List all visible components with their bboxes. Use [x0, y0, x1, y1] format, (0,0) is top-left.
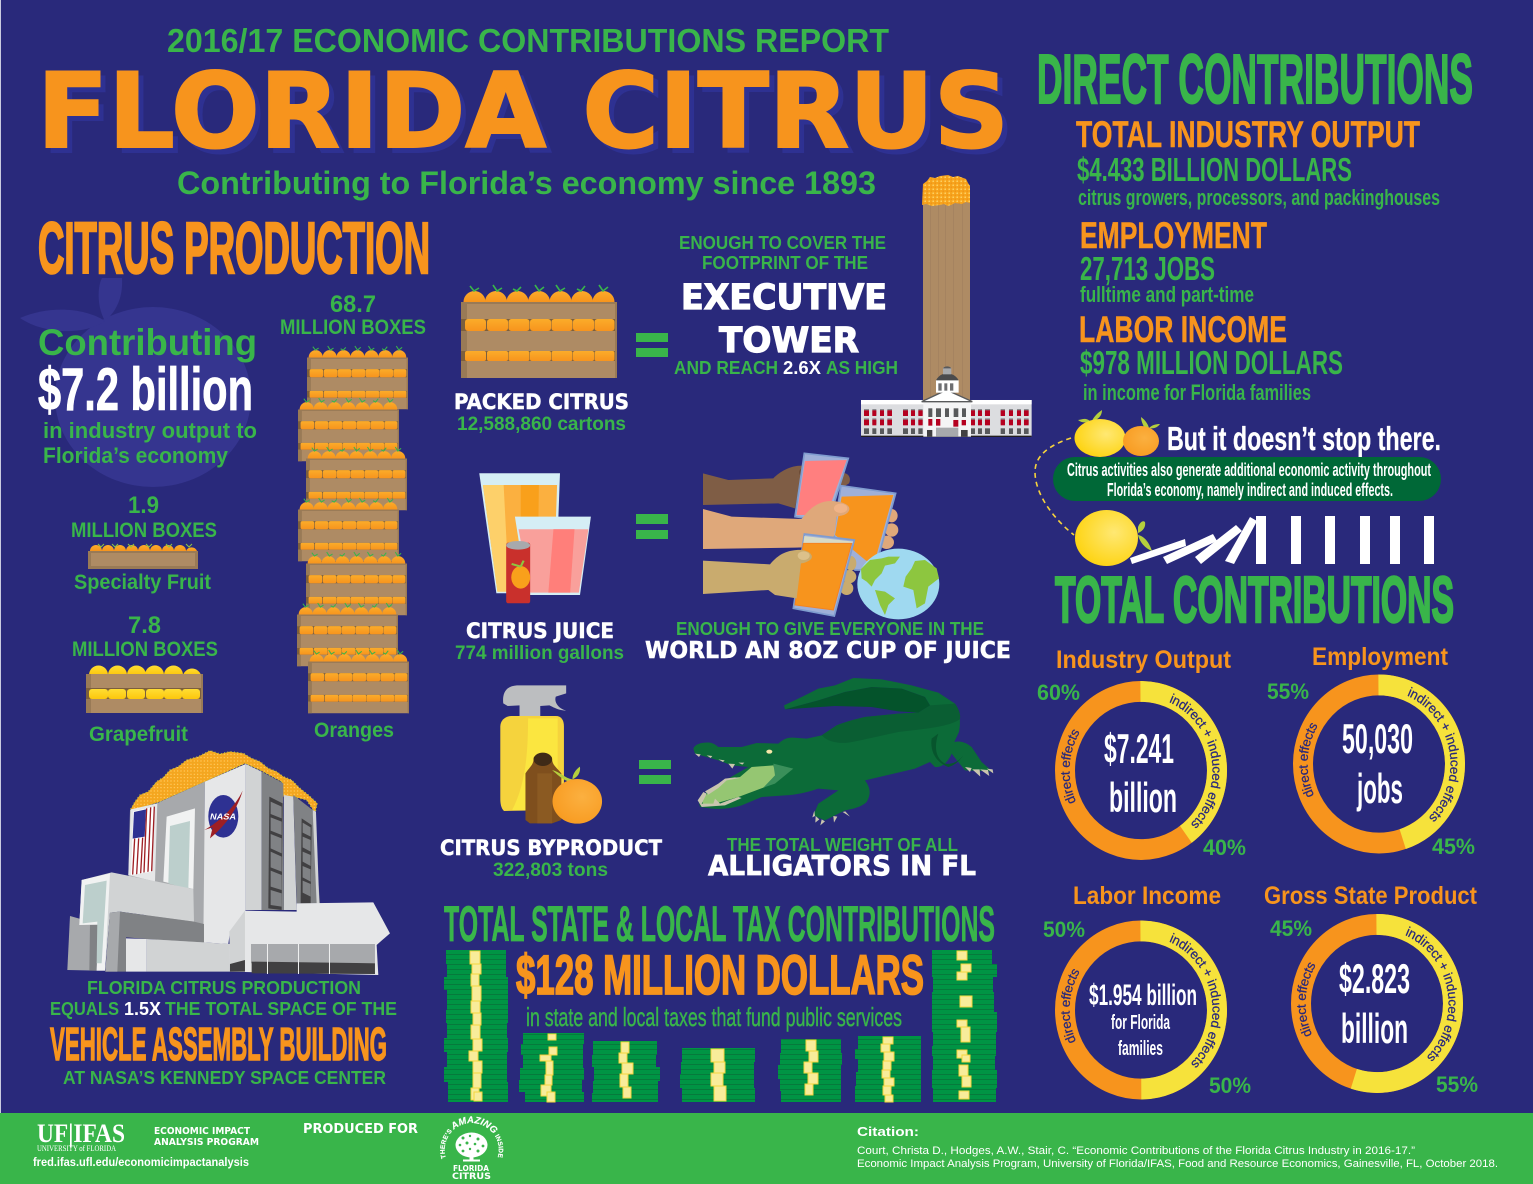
alligator comparison text	[708, 835, 976, 882]
building comparison text	[50, 978, 397, 1088]
chart: labor income donut: 50%	[1043, 917, 1085, 942]
chart: employment donut: 50,030	[1342, 715, 1413, 762]
chart: labor income donut: 50%	[1209, 1073, 1251, 1098]
panel: citrus byproduct comparison	[440, 678, 993, 882]
callout: contributing $7.2 billion: Contributing	[38, 322, 257, 363]
callout: contributing $7.2 billion: $7.2 billion	[38, 356, 253, 423]
executive tower text: ENOUGH TO COVER THE	[679, 233, 886, 253]
alligator comparison text: ALLIGATORS IN FL	[708, 849, 976, 882]
tax amount: $128 MILLION DOLLARS	[516, 943, 924, 1006]
juice label	[455, 619, 624, 664]
chart: employment donut: direct effects	[1299, 723, 1318, 797]
chart: gross state product donut: Gross State Product	[1264, 882, 1478, 910]
header block	[37, 22, 1014, 201]
icon: alligator	[693, 678, 993, 825]
chart: industry output donut: billion	[1109, 774, 1177, 821]
icon: tower of crates and capitol	[861, 175, 1032, 437]
logo: Florida Citrus: THERE’S AMAZING INSIDE	[440, 1116, 504, 1160]
panel: direct contributions	[1037, 40, 1473, 405]
grapefruit: 7.8	[128, 612, 161, 639]
oranges: 68.7	[330, 291, 376, 318]
icon: right tall money stack	[932, 950, 997, 1102]
callout pill	[1053, 457, 1441, 501]
icon: NASA vehicle assembly building topped with citrus: NASA	[210, 811, 236, 821]
callout: contributing $7.2 billion	[38, 322, 257, 468]
byproduct label: CITRUS BYPRODUCT	[440, 836, 663, 860]
citation: Economic Impact Analysis Program, University of Florida/IFAS, Food and Resource Economics, Gainesville, FL, October 2018.	[857, 1158, 1498, 1170]
chart: employment donut: 55%	[1267, 679, 1309, 704]
chart: industry output donut: Industry Output	[1056, 646, 1232, 674]
labor income: LABOR INCOME	[1079, 309, 1287, 350]
produced for label: PRODUCED FOR	[303, 1122, 418, 1137]
chart: gross state product donut: $2.823	[1339, 955, 1410, 1002]
footer band	[0, 1113, 1533, 1184]
chart: employment donut: jobs	[1356, 765, 1403, 812]
building comparison text: THE TOTAL SPACE OF THE	[165, 999, 397, 1019]
main title: FLORIDA CITRUS	[37, 52, 1009, 172]
icon: packed citrus crate	[461, 285, 617, 378]
chart: employment donut: 45%	[1432, 834, 1475, 859]
icon: hands toasting and globe	[703, 453, 939, 619]
program name	[154, 1126, 259, 1148]
logo: Florida Citrus: CITRUS	[452, 1172, 491, 1182]
icon: left tall money stack	[444, 950, 508, 1102]
icon: money stack 5	[778, 1039, 842, 1102]
icon: juice glasses and can	[479, 473, 591, 603]
icon: equals sign	[639, 760, 671, 784]
panel: vehicle assembly building	[50, 751, 397, 1088]
employment: fulltime and part-time	[1080, 282, 1254, 307]
juice comparison text: WORLD AN 8OZ CUP OF JUICE	[645, 638, 1011, 664]
total industry output: $4.433 BILLION DOLLARS	[1077, 151, 1352, 188]
text: VEHICLE ASSEMBLY BUILDING	[50, 1018, 387, 1070]
logo: UF IFAS: UNIVERSITY of FLORIDA	[37, 1144, 116, 1153]
icon: lemon knocking over dominoes	[1075, 510, 1434, 566]
chart: labor income donut: $1.954 billion	[1089, 979, 1197, 1012]
icon: NASA vehicle assembly building topped with citrus	[67, 751, 390, 975]
panel: packed citrus comparison	[454, 175, 1032, 437]
panel: citrus production	[20, 209, 430, 746]
callout: contributing $7.2 billion: in industry output to	[43, 418, 257, 443]
specialty fruit	[71, 492, 217, 594]
executive tower text: AND REACH	[674, 358, 778, 378]
chart: labor income donut: direct effects	[1061, 969, 1080, 1043]
logo: Florida Citrus: FLORIDA	[453, 1164, 489, 1173]
logo: Florida Citrus	[440, 1116, 504, 1182]
logo: UF IFAS: UF|IFAS	[37, 1119, 125, 1148]
icon: lemon and orange	[1074, 410, 1160, 457]
chart: gross state product donut: 45%	[1270, 916, 1312, 941]
chart: employment donut: Employment	[1312, 643, 1449, 671]
chart: gross state product donut: direct effects	[1297, 962, 1316, 1036]
specialty fruit: MILLION BOXES	[71, 519, 217, 542]
icon: equals sign	[636, 514, 668, 539]
byproduct label: 322,803 tons	[493, 860, 608, 881]
building comparison text: FLORIDA CITRUS PRODUCTION	[87, 978, 361, 998]
chart: industry output donut: indirect + induced effects	[1170, 693, 1221, 828]
panel: tax contributions	[444, 896, 997, 1102]
labor income: $978 MILLION DOLLARS	[1080, 344, 1343, 381]
specialty fruit: Specialty Fruit	[74, 571, 211, 594]
packed citrus label: 12,588,860 cartons	[457, 413, 626, 435]
chart: gross state product donut: billion	[1341, 1005, 1408, 1052]
oranges	[280, 291, 426, 742]
report subtitle: 2016/17 ECONOMIC CONTRIBUTIONS REPORT	[167, 22, 889, 59]
chart: industry output donut: 40%	[1203, 835, 1246, 860]
building comparison text: 1.5X	[124, 999, 161, 1019]
website url: fred.ifas.ufl.edu/economicimpactanalysis	[33, 1157, 249, 1169]
program name: ANALYSIS PROGRAM	[154, 1137, 259, 1148]
icon: equals sign	[636, 333, 668, 357]
main title: FLORIDA CITRUS	[42, 57, 1014, 177]
oranges: Oranges	[314, 719, 394, 742]
juice label: CITRUS JUICE	[466, 619, 614, 643]
executive tower text: TOWER	[719, 321, 859, 361]
byproduct label	[440, 836, 663, 881]
heading: citrus production: CITRUS PRODUCTION	[38, 209, 430, 289]
employment: 27,713 JOBS	[1080, 250, 1215, 287]
citation	[857, 1124, 1498, 1170]
callout: contributing $7.2 billion: Florida’s economy	[43, 443, 229, 468]
oranges: MILLION BOXES	[280, 316, 426, 339]
icon: spray bottle, brown bottle and orange	[500, 685, 602, 824]
chart: employment donut: indirect + induced effects	[1408, 686, 1459, 822]
chart: industry output donut	[1037, 646, 1246, 860]
executive tower text: AS HIGH	[826, 358, 898, 378]
chart: labor income donut: Labor Income	[1073, 882, 1221, 910]
executive tower text: FOOTPRINT OF THE	[702, 253, 868, 273]
juice comparison text: ENOUGH TO GIVE EVERYONE IN THE	[676, 619, 984, 639]
icon: money stack 4	[680, 1048, 755, 1102]
chart: gross state product donut: indirect + induced effects	[1406, 926, 1457, 1062]
packed citrus label	[454, 390, 629, 435]
icon: money stack 6	[855, 1036, 921, 1102]
heading: tax contributions: TOTAL STATE & LOCAL TAX CONTRIBUTIONS	[444, 896, 995, 952]
icon: money stack 2	[519, 1033, 584, 1102]
citation: Citation:	[857, 1124, 919, 1139]
icon: stack of orange crates	[297, 346, 409, 713]
tagline: Contributing to Florida’s economy since 1893	[177, 165, 876, 201]
tax description: in state and local taxes that fund public services	[526, 1002, 902, 1032]
building comparison text: AT NASA’S KENNEDY SPACE CENTER	[63, 1068, 386, 1088]
chart: industry output donut: 60%	[1037, 680, 1080, 705]
icon: money stack 3	[592, 1041, 660, 1102]
grapefruit: MILLION BOXES	[72, 638, 218, 661]
total industry output	[1076, 114, 1440, 210]
employment	[1080, 215, 1267, 307]
grapefruit: Grapefruit	[89, 723, 188, 746]
employment: EMPLOYMENT	[1080, 215, 1267, 256]
alligator comparison text: THE TOTAL WEIGHT OF ALL	[727, 835, 958, 855]
juice label: 774 million gallons	[455, 642, 624, 664]
chart: labor income donut	[1043, 882, 1251, 1100]
labor income	[1079, 309, 1343, 405]
executive tower text: 2.6X	[783, 358, 821, 378]
chart: labor income donut: indirect + induced effects	[1170, 932, 1221, 1068]
chart: labor income donut: families	[1118, 1038, 1163, 1060]
panel: but it doesn't stop there	[1035, 410, 1441, 566]
juice comparison text	[645, 619, 1011, 664]
packed citrus label: PACKED CITRUS	[454, 390, 629, 414]
executive tower text: EXECUTIVE	[681, 278, 887, 318]
icon: grapefruit crate	[86, 666, 203, 713]
chart: gross state product donut	[1264, 882, 1478, 1097]
citation: Court, Christa D., Hodges, A.W., Stair, C. “Economic Contributions of the Florida Citrus Industry in 2016-17.”	[857, 1145, 1415, 1157]
executive tower text	[674, 233, 898, 378]
building comparison text: EQUALS	[50, 999, 119, 1019]
chart: industry output donut: direct effects	[1061, 730, 1080, 804]
specialty fruit: 1.9	[128, 492, 159, 519]
dashed path	[1035, 438, 1074, 535]
chart: gross state product donut: 55%	[1436, 1072, 1478, 1097]
grapefruit	[72, 612, 218, 746]
icon: specialty fruit crate	[88, 544, 198, 569]
program name: ECONOMIC IMPACT	[154, 1126, 250, 1137]
labor income: in income for Florida families	[1083, 380, 1311, 405]
chart: industry output donut: $7.241	[1104, 725, 1174, 772]
chart: labor income donut: for Florida	[1111, 1012, 1171, 1034]
chart: employment donut	[1267, 643, 1475, 859]
icon: orange silhouette	[20, 278, 251, 487]
panel: citrus juice comparison	[455, 453, 1011, 664]
